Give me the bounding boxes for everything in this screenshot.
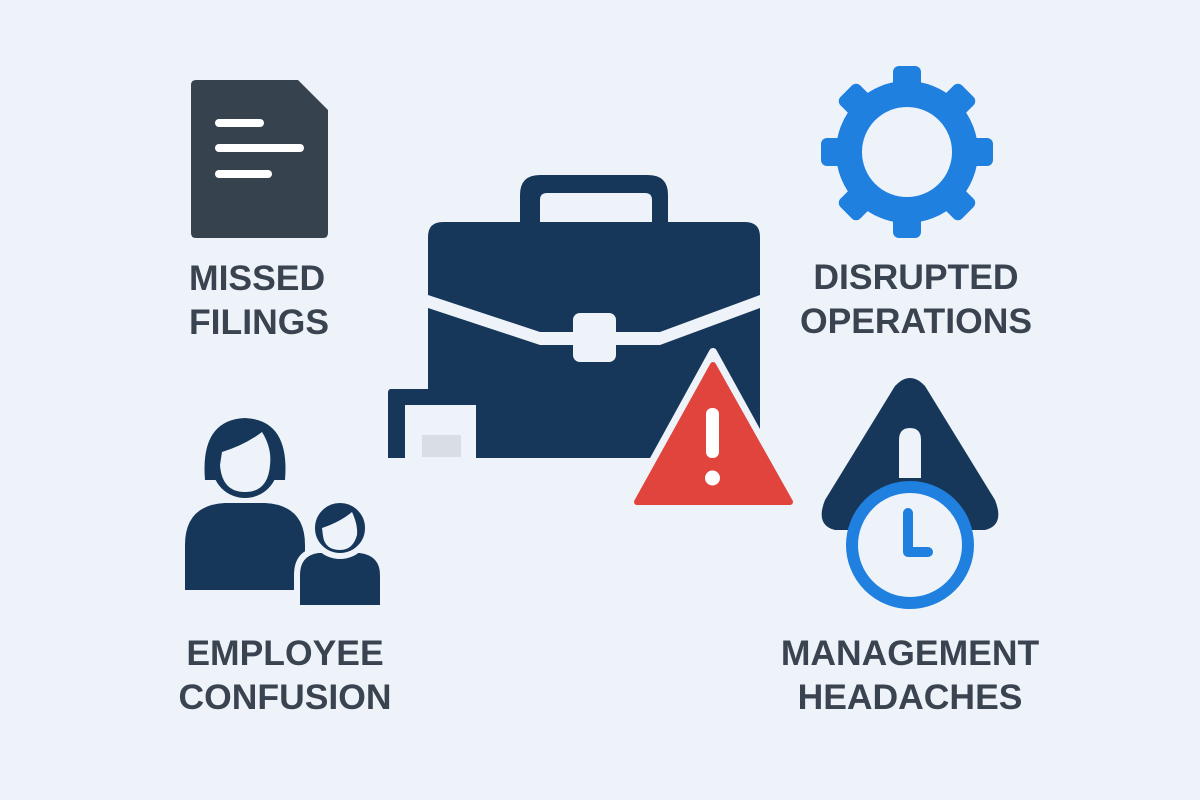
icon: gear [821, 66, 993, 238]
icon: red warning triangle [626, 352, 800, 510]
label: employee confusion: EMPLOYEE [186, 633, 384, 673]
icon: document [191, 80, 328, 238]
label: missed filings [189, 258, 329, 342]
icon: briefcase with warning [388, 175, 800, 510]
label: employee confusion [178, 633, 392, 717]
label: disrupted operations: OPERATIONS [800, 301, 1032, 341]
label: disrupted operations: DISRUPTED [813, 257, 1019, 297]
label: disrupted operations [800, 257, 1032, 341]
label: management headaches [781, 633, 1039, 717]
icon: people [185, 418, 383, 608]
label: employee confusion: CONFUSION [178, 677, 392, 717]
label: management headaches: MANAGEMENT [781, 633, 1039, 673]
label: management headaches: HEADACHES [798, 677, 1022, 717]
label: missed filings: MISSED [189, 258, 325, 298]
icon: warning with clock [822, 378, 998, 603]
label: missed filings: FILINGS [189, 302, 329, 342]
